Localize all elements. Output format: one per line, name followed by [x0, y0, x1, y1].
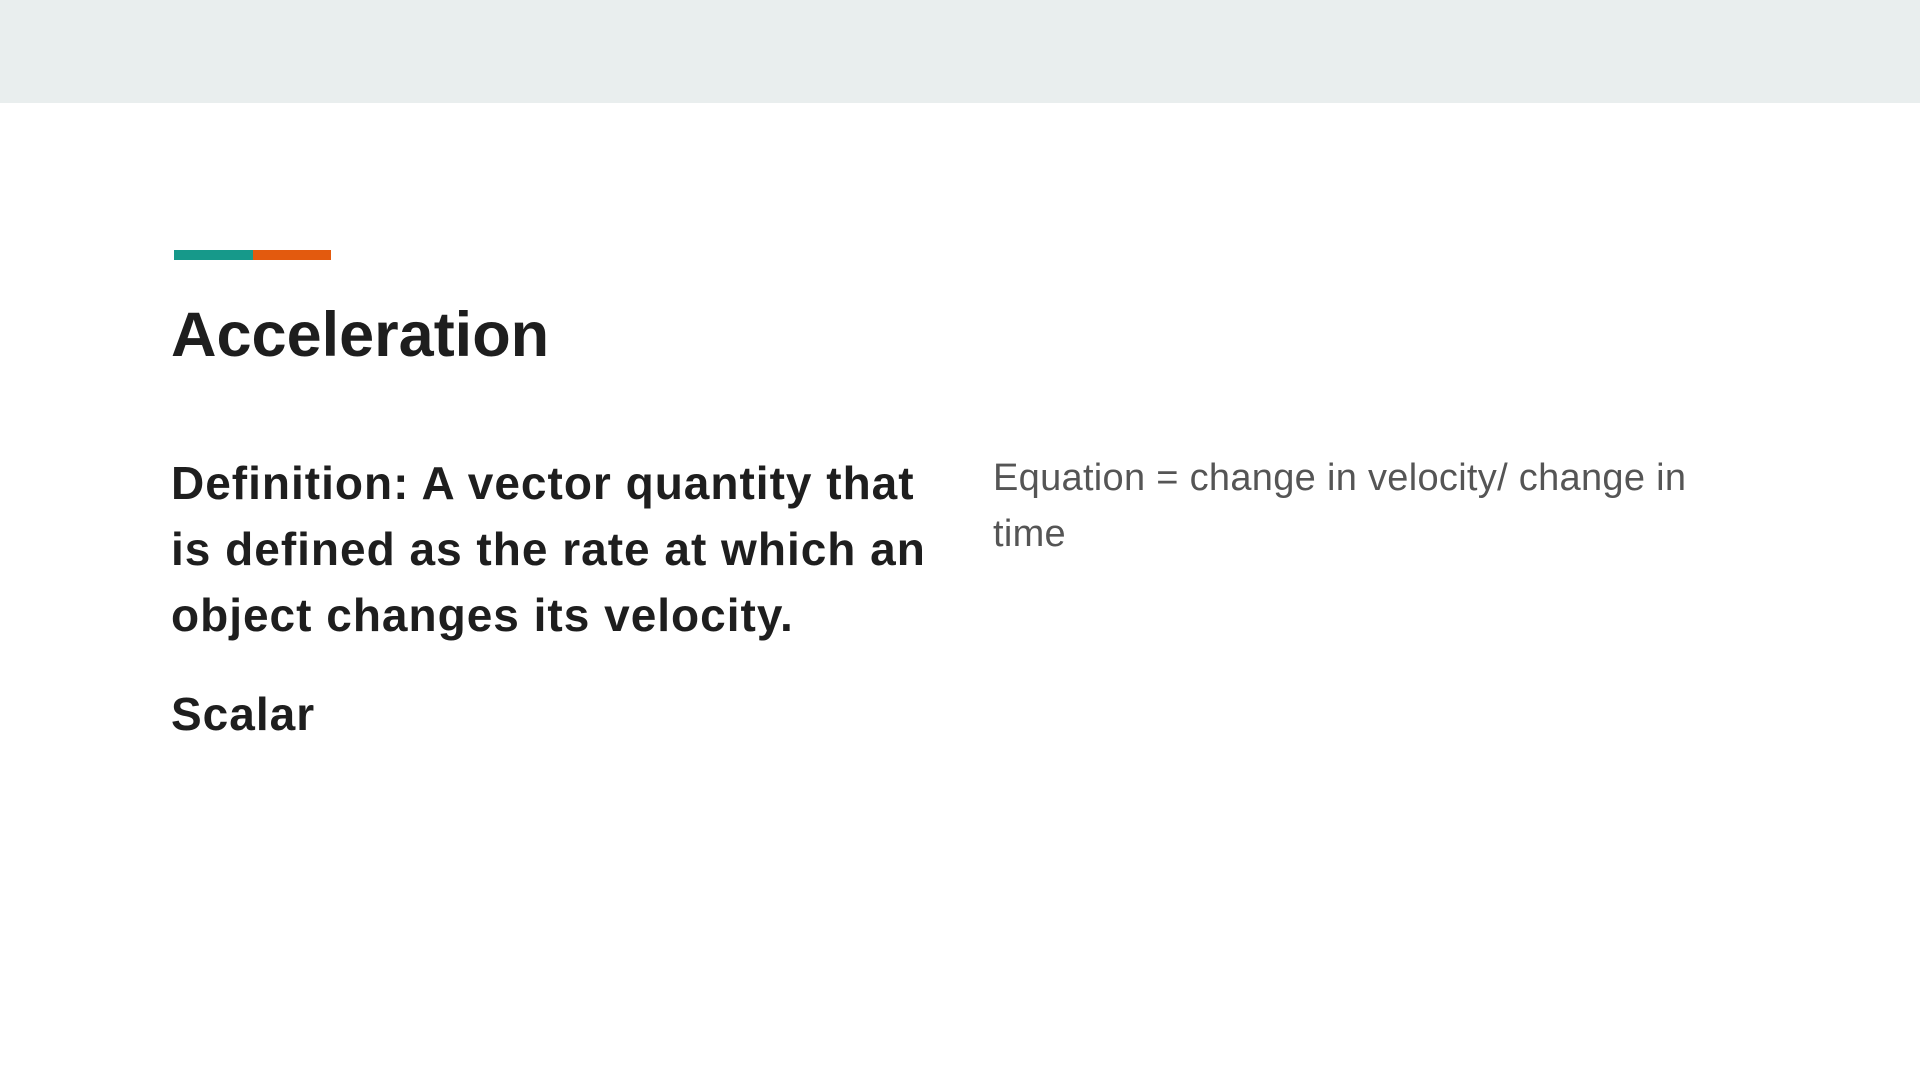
definition text: Definition: A vector quantity that: [171, 457, 915, 509]
title: Acceleration: [171, 300, 549, 370]
definition text: object changes its velocity.: [171, 589, 794, 641]
equation text: [993, 457, 1686, 555]
accent bar: [174, 250, 331, 260]
definition text: is defined as the rate at which an: [171, 523, 926, 575]
header band: [0, 0, 1920, 103]
scalar label: Scalar: [171, 688, 315, 740]
definition text: [171, 457, 926, 641]
equation text: time: [993, 513, 1066, 555]
equation text: Equation = change in velocity/ change in: [993, 457, 1686, 499]
